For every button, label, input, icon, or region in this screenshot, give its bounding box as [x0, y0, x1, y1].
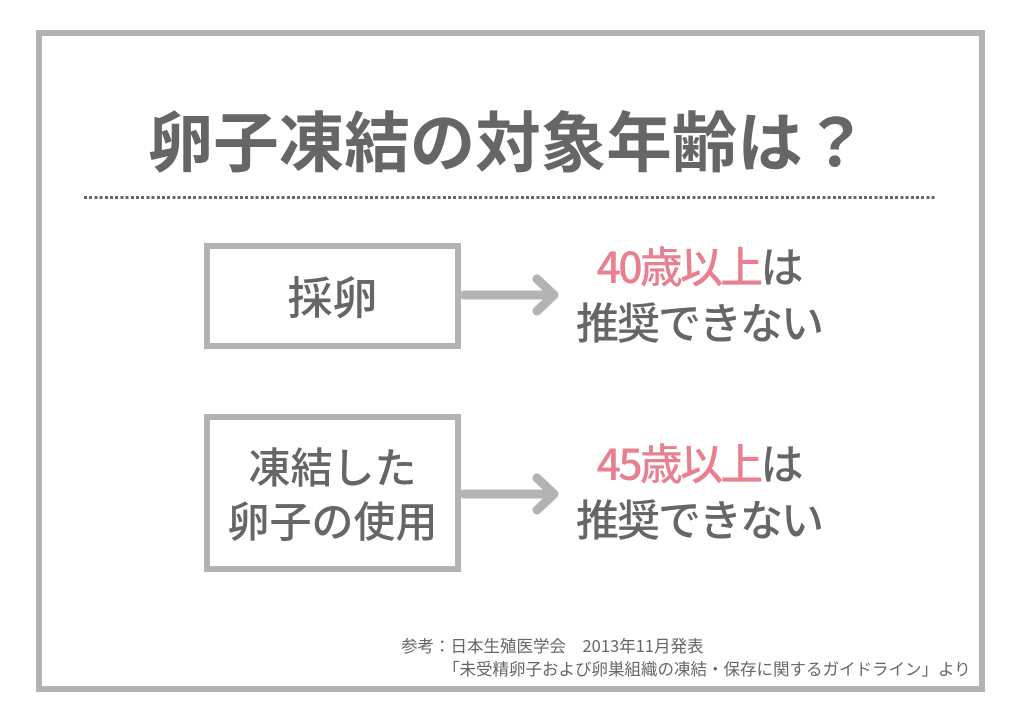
label: use of frozen eggs: 凍結した [248, 435, 416, 496]
source note: 参考：日本生殖医学会 2013年11月発表 [401, 633, 703, 657]
label: use of frozen eggs [227, 435, 438, 550]
box: use of frozen eggs [204, 414, 461, 572]
result: egg retrieval age limit [576, 234, 822, 352]
source note [401, 633, 971, 680]
box: egg retrieval [204, 243, 461, 349]
result: use age limit [576, 431, 822, 549]
result: use age limit: 推奨できない [576, 487, 822, 549]
arrow: egg retrieval to age limit [461, 274, 558, 316]
source note: 「未受精卵子および卵巣組織の凍結・保存に関するガイドライン」より [443, 656, 971, 680]
result: use age limit: 45歳以上は [596, 431, 802, 493]
title: 卵子凍結の対象年齢は？ [148, 90, 868, 185]
label: use of frozen eggs: 卵子の使用 [227, 489, 438, 550]
result: egg retrieval age limit: 40歳以上は [596, 234, 802, 296]
arrow: use to age limit [461, 474, 558, 514]
result: egg retrieval age limit: 推奨できない [576, 290, 822, 352]
label: egg retrieval: 採卵 [287, 262, 378, 327]
